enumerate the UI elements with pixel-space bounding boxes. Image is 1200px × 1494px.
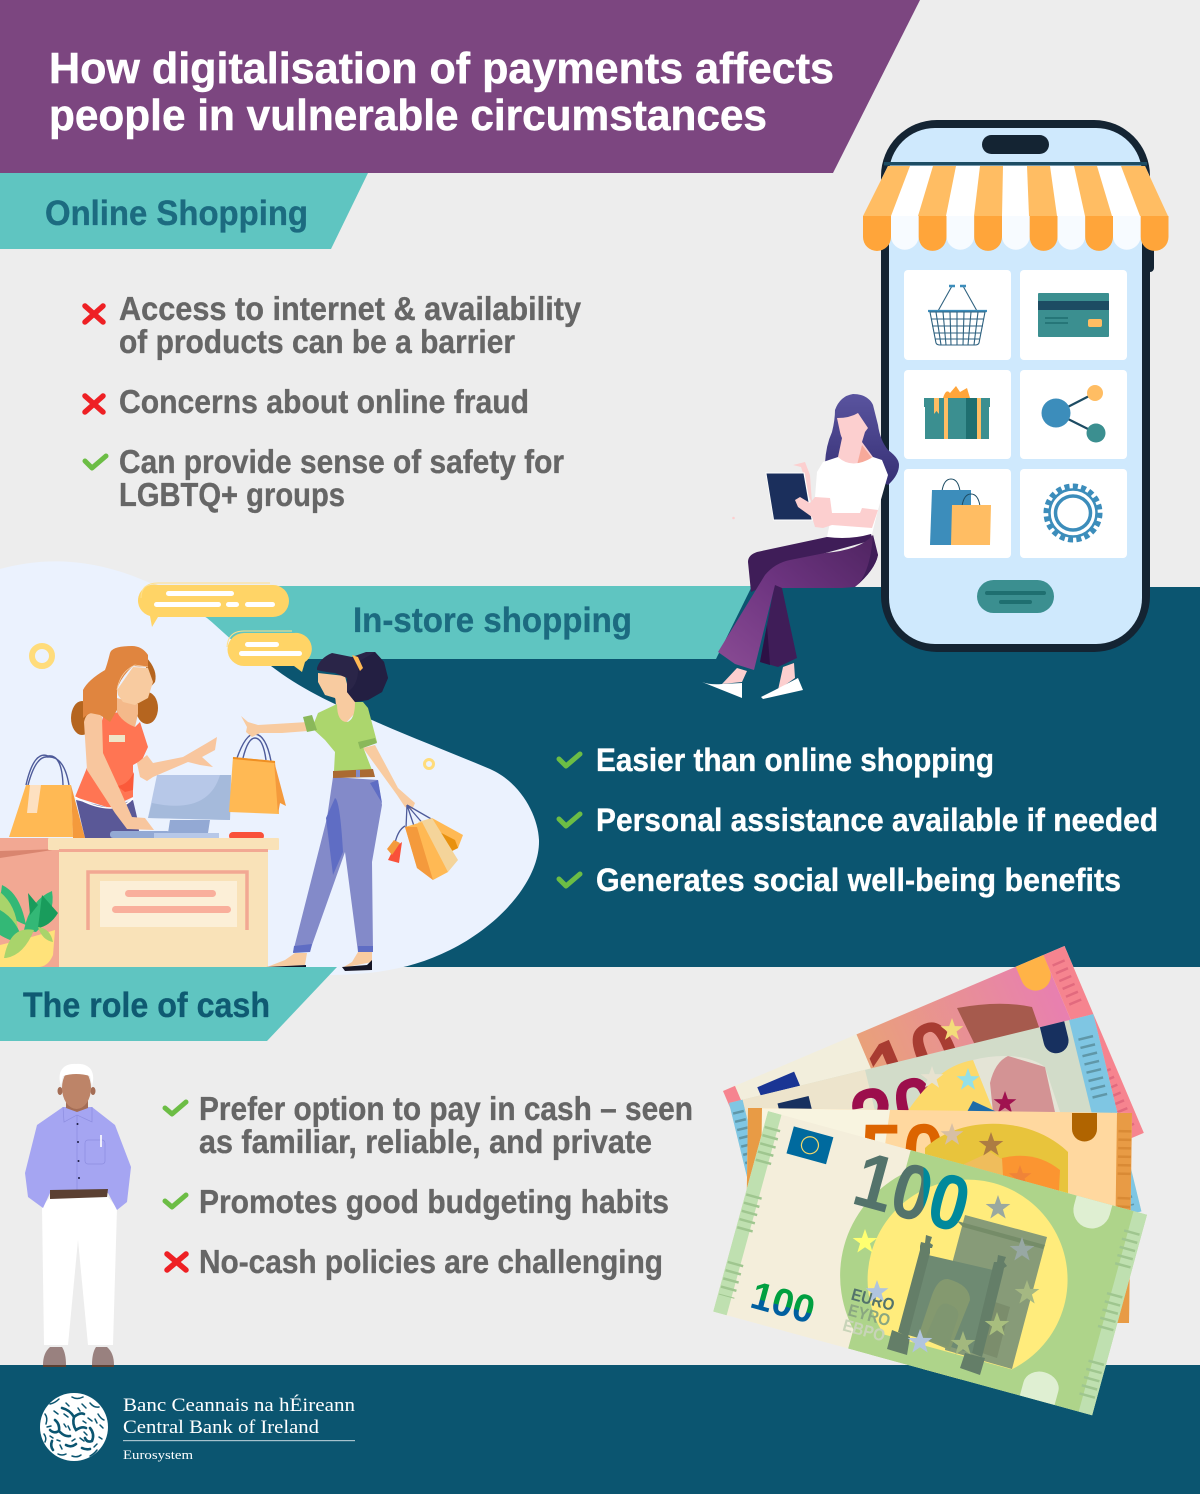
illustration: shopping bag on counter [9,755,85,838]
icon: check 1 [559,754,580,766]
icon: shopping bags [930,479,991,545]
banknote 100: 100 [746,1274,819,1332]
illustration: till [110,775,264,840]
name badge [109,735,125,742]
shirt detail [63,1107,105,1190]
banknote 10: 10 [854,1000,976,1124]
icon: basket [928,286,987,345]
neck [838,438,873,468]
speech bubble 2 [227,631,312,672]
in-store blob background [0,561,539,975]
icon: check [85,456,106,468]
bullet: internet access: of products can be a barrier [119,323,515,360]
bullet: budgeting: Promotes good budgeting habits [199,1183,669,1220]
thigh back [748,534,873,592]
banknote 20: 20 [841,1057,949,1171]
icon: cross 1 [85,306,103,322]
face [62,1067,91,1109]
bullet: safety [119,443,564,513]
in-store dark band [0,587,1200,967]
trousers [42,1197,117,1345]
illustration: counter [0,838,279,968]
icon: check 2 [559,814,580,826]
shirt [312,702,377,771]
chest skin [335,690,356,724]
logo: central bank of ireland [40,1393,108,1461]
heading: the role of cash: The role of cash [23,986,270,1025]
bullet: online fraud: Concerns about online fraud [119,383,529,420]
right ear [90,1087,96,1095]
neck [66,1100,88,1112]
phone home pill [977,580,1054,613]
raised hand [793,462,812,503]
hair front [83,646,148,722]
icon: check 2 [165,1195,186,1207]
footer wordmark: Eurosystem [123,1447,193,1462]
illustration: older man [25,1064,131,1367]
illustration: phone [863,120,1168,652]
speech bubble 1 [138,583,289,627]
bullet: internet access: Access to internet & availability [119,290,582,327]
banknote 50 [745,1107,1132,1323]
icon: check 3 [559,874,580,886]
face [318,673,348,703]
heading: online shopping [0,173,368,249]
heading: the role of cash [0,967,337,1041]
skirt [76,800,140,838]
icon: credit card [1038,293,1109,337]
footer wordmark: Central Bank of Ireland [123,1417,320,1438]
bullet: safety: Can provide sense of safety for [119,443,564,480]
heading: in-store shopping: In-store shopping [353,601,632,640]
illustration: shopper [241,652,415,971]
belt [50,1189,108,1199]
footer band [0,1365,1200,1494]
icon: cross 2 [85,396,103,412]
banknote 100: EYRO [846,1301,892,1330]
back leg [760,582,797,667]
feet [722,663,795,690]
banknote 100: EURO [849,1285,897,1315]
banknote 100: 100 [845,1134,979,1250]
banknote 100: EBPO [841,1316,887,1345]
neck [117,698,138,727]
feet [267,952,372,968]
in-store list [559,742,1158,898]
icon: check 1 [165,1102,186,1114]
soles [43,1365,114,1367]
hair [60,1064,93,1086]
banknote 50: 50 [860,1107,945,1203]
belt [333,769,375,778]
icon: gift [924,386,990,439]
bullet: no-cash: No-cash policies are challenging [199,1243,663,1280]
top [75,712,148,808]
bullet: personal assistance: Personal assistance available if needed [596,802,1158,838]
shoes [43,1347,114,1365]
front leg [718,535,878,670]
bullet: internet access [119,290,582,360]
title banner [0,0,920,173]
jeans [293,777,382,952]
hair [825,394,899,485]
awning [863,162,1168,251]
pen [100,1135,102,1147]
illustration: bag held out [229,734,286,814]
cathedral [887,1215,1047,1375]
shirt buttons [76,1123,80,1179]
bullet: social: Generates social well-being benefits [596,862,1121,898]
icon: gear [1046,486,1100,540]
banknote 10 [723,946,1144,1278]
shirt [25,1107,131,1210]
banknote 100 [713,1111,1147,1416]
illustration: woman with tablet [702,394,899,699]
bullet: safety: LGBTQ+ groups [119,476,345,513]
bullet: easier: Easier than online shopping [596,742,994,778]
illustration: shopper bags [387,805,463,880]
tablet [766,472,813,520]
decorative rings [32,646,434,768]
bullet: prefer cash: as familiar, reliable, and private [199,1123,652,1160]
bullet: prefer cash: Prefer option to pay in cash – seen [199,1090,693,1127]
app tiles [904,270,1127,558]
heading: in-store shopping [170,586,752,659]
cash list [165,1090,693,1280]
shirt [815,457,888,538]
title banner: people in vulnerable circumstances [49,91,767,140]
face [837,413,868,447]
arms [84,713,154,830]
stars [853,1195,1039,1355]
banknote 20 [729,1014,1141,1300]
heading: online shopping: Online Shopping [45,194,308,233]
illustration: cashier [71,646,217,838]
arms [241,716,308,737]
hair [317,652,388,702]
title banner: How digitalisation of payments affects [49,44,834,93]
icon: share [1042,385,1106,442]
face [117,667,153,705]
forearm [795,497,878,528]
illustration: plant [0,885,58,967]
footer wordmark [123,1394,356,1462]
left ear [58,1087,62,1095]
icon: cross [167,1254,186,1270]
online shopping list [85,290,582,513]
stray dot [732,517,735,519]
illustration: euro banknotes [707,946,1150,1437]
footer wordmark: Banc Ceannais na hÉireann [123,1394,356,1416]
bullet: prefer cash [199,1090,693,1160]
